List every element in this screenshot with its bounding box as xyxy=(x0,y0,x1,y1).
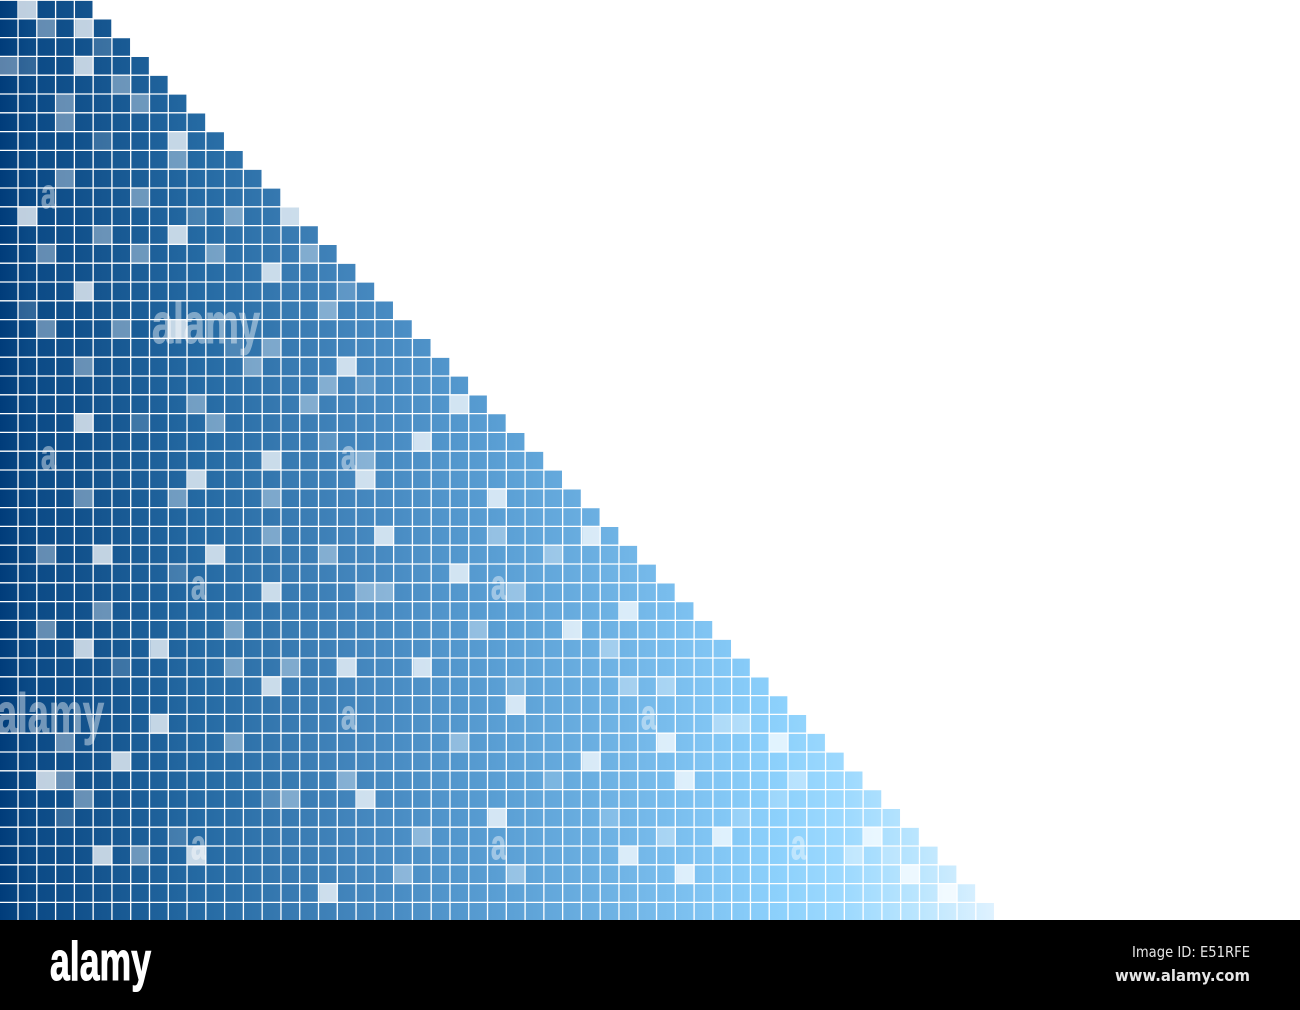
faint highlighted tiles xyxy=(19,38,901,865)
watermark: small letter marks: a xyxy=(341,691,356,738)
watermark: small letter marks: a xyxy=(641,691,656,738)
white grid lines xyxy=(18,0,995,925)
mosaic staircase of blue tiles xyxy=(0,0,1014,940)
footer bar xyxy=(0,920,1300,1010)
watermark: small letter marks xyxy=(41,170,806,868)
gradient staircase shape xyxy=(0,0,995,940)
alamy logo: alamy xyxy=(50,930,151,992)
medium highlighted tiles xyxy=(0,19,863,884)
watermark: small letter marks: a xyxy=(41,431,56,478)
website url: www.alamy.com xyxy=(1115,966,1250,985)
bright highlighted tiles xyxy=(19,0,957,902)
image id: Image ID: E51RFE xyxy=(1132,943,1250,961)
watermark: small letter marks: a xyxy=(491,561,506,608)
watermark overlays xyxy=(0,170,806,868)
watermark: small letter marks: a xyxy=(791,821,806,868)
watermark: small letter marks: a xyxy=(41,170,56,217)
watermark: small letter marks: a xyxy=(191,821,206,868)
watermark: small letter marks: a xyxy=(341,431,356,478)
footer background xyxy=(0,920,1300,1010)
watermark: large alamy left: alamy xyxy=(0,682,104,746)
watermark: small letter marks: a xyxy=(491,821,506,868)
watermark: large alamy centre: alamy xyxy=(152,292,260,356)
watermark: small letter marks: a xyxy=(191,561,206,608)
